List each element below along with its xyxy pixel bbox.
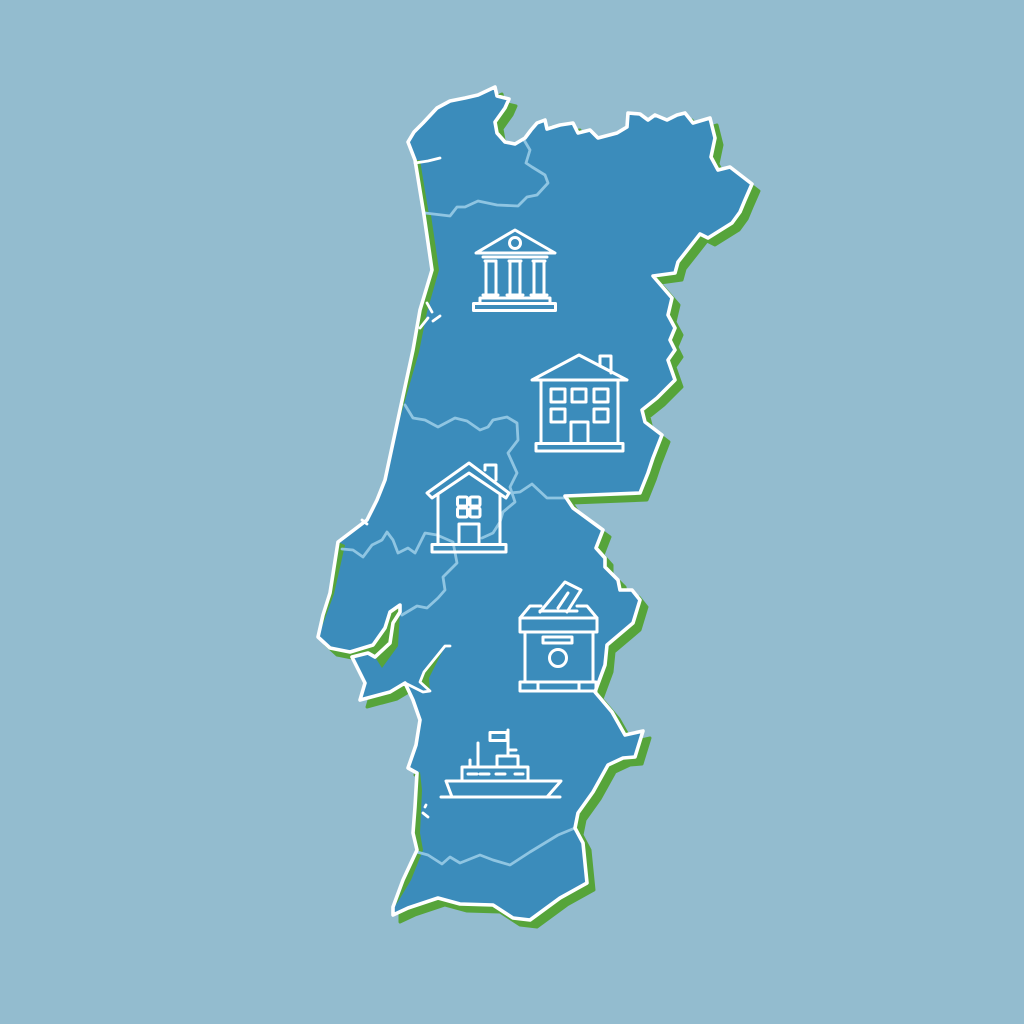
icon: ballot box [520, 582, 597, 691]
icon: government building [474, 230, 556, 310]
icon: house [427, 463, 509, 552]
icon: apartment building [532, 355, 627, 451]
map white outline [318, 87, 752, 920]
map blue land [318, 87, 752, 920]
icon: ship [441, 730, 561, 797]
map: Portugal [318, 87, 759, 927]
coastal details [362, 158, 450, 817]
west coast green inner edge [320, 160, 445, 905]
map green extruded edge [325, 94, 759, 927]
regional borders [342, 140, 575, 865]
